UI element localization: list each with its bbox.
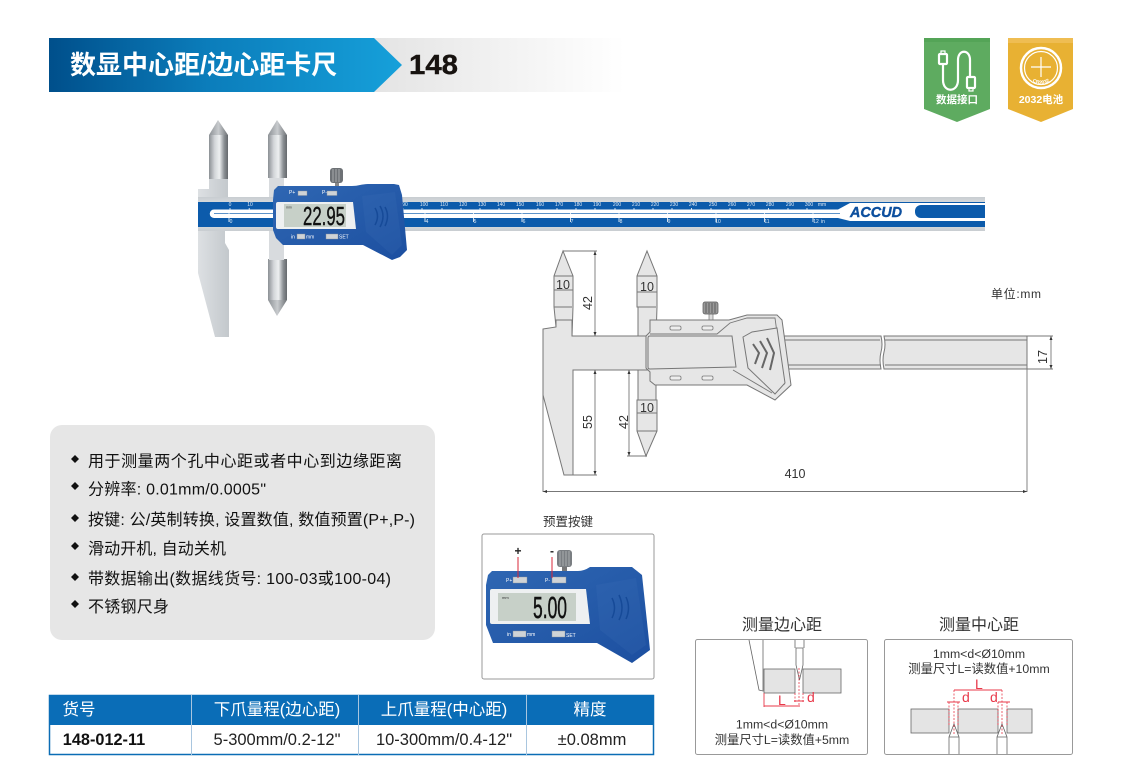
buttons: mm [306, 234, 314, 240]
dimension labels: 410 [785, 467, 805, 481]
inch scale numbers: 11 [764, 219, 770, 225]
data row: 5-300mm/0.2-12" [214, 731, 341, 749]
unit note: 单位:mm [991, 286, 1041, 301]
mm scale numbers: 180 [574, 202, 582, 208]
LCD frame [490, 589, 590, 624]
mm scale numbers: 260 [728, 202, 736, 208]
mm scale numbers: 90 [402, 202, 408, 208]
inch scale numbers: 7 [571, 219, 574, 225]
title: 数显中心距/边心距卡尺 [70, 50, 337, 80]
LCD screen [284, 204, 346, 227]
buttons: in [291, 234, 295, 240]
mm scale numbers: 230 [670, 202, 678, 208]
pin lines [554, 276, 657, 431]
red dimensions [795, 668, 803, 706]
workpiece [764, 669, 841, 693]
dimension letters: d [962, 689, 970, 705]
inch scale numbers: 6 [523, 219, 526, 225]
grip panel [362, 192, 402, 255]
icon: coin cell: CR2032 [1033, 78, 1050, 84]
grip chevrons [753, 338, 774, 370]
grip chevrons [375, 206, 388, 227]
mm scale numbers: 110 [440, 202, 448, 208]
feature list panel [50, 425, 435, 640]
buttons: P+ [506, 578, 512, 584]
mm scale numbers: 100 [420, 202, 428, 208]
panel: preset keys: mm [502, 595, 509, 600]
panel: preset keys [482, 534, 654, 679]
thumb wheel [703, 302, 718, 321]
mm scale numbers: 120 [459, 202, 467, 208]
mm scale numbers: 130 [478, 202, 486, 208]
dimension labels: 10 [640, 401, 654, 415]
grip panel [743, 328, 785, 394]
inch scale numbers: 0 [230, 219, 233, 225]
pins [949, 724, 1007, 754]
inch scale numbers: 12 [813, 219, 819, 225]
badge: data port [924, 38, 990, 122]
buttons: SET [339, 234, 349, 240]
mm scale numbers: 250 [709, 202, 717, 208]
brand logo: ACCUD [849, 204, 902, 221]
sliding jaw [269, 178, 284, 260]
technical drawing [543, 251, 1053, 493]
data row: 10-300mm/0.4-12" [376, 731, 512, 749]
buttons: SET [566, 633, 576, 639]
specification table [49, 695, 654, 755]
electronics housing [486, 567, 650, 663]
feature text: 按键: 公/英制转换, 设置数值, 数值预置(P+,P-) [88, 511, 415, 529]
fixed jaw [749, 640, 763, 691]
buttons: P+ [289, 190, 295, 196]
mm scale numbers: 140 [497, 202, 505, 208]
dimension labels: 10 [640, 280, 654, 294]
dimension letters: d [807, 689, 815, 705]
dimension letters: L [975, 676, 983, 692]
badge: 2032 battery [1008, 38, 1073, 122]
header banner [49, 38, 625, 92]
mm scale numbers: mm [818, 202, 826, 208]
buttons: in [507, 632, 511, 638]
formula: 1mm<d<Ø10mm [736, 718, 828, 732]
mm scale numbers: 280 [766, 202, 774, 208]
feature text: 带数据输出(数据线货号: 100-03或100-04) [88, 570, 391, 588]
feature text: 不锈钢尺身 [88, 598, 169, 616]
pin [795, 640, 804, 680]
buttons: P- [322, 190, 327, 196]
header labels: 下爪量程(边心距) [214, 700, 340, 719]
buttons [506, 577, 576, 639]
electronics housing [273, 184, 407, 260]
header labels [62, 700, 606, 719]
dimension lines [543, 251, 1053, 492]
preset keys heading: 预置按键 [543, 515, 593, 529]
lower pin [637, 370, 657, 456]
ruler ticks [229, 208, 813, 222]
dimension letters: d [990, 689, 998, 705]
button outlines [670, 326, 713, 380]
inch scale numbers [230, 219, 825, 225]
feature text: 分辨率: 0.01mm/0.0005" [88, 480, 266, 498]
formula: 1mm<d<Ø10mm [933, 647, 1025, 661]
data row: ±0.08mm [558, 731, 626, 749]
fixed jaw and beam [543, 320, 647, 475]
plus and minus marks: - [550, 544, 554, 558]
feature text: 滑动开机, 自动关机 [88, 540, 226, 558]
LCD frame [276, 202, 356, 229]
LCD reading: 22.95 [303, 201, 345, 231]
inch scale numbers: 4 [426, 219, 429, 225]
panel: edge distance [696, 640, 868, 754]
grip panel [596, 578, 646, 655]
header labels: 精度 [574, 700, 606, 719]
LCD reading: 5.00 [533, 590, 567, 625]
mm scale numbers: 170 [555, 202, 563, 208]
badge label: 2032电池 [1019, 93, 1064, 106]
inch scale numbers: 10 [715, 219, 721, 225]
mm scale numbers: 270 [747, 202, 755, 208]
bullet markers [71, 455, 79, 608]
upper pin left [209, 120, 228, 179]
red dimensions [949, 690, 1007, 735]
dimension labels: 42 [581, 296, 595, 310]
formula: 测量尺寸L=读数值+5mm [715, 732, 849, 747]
mm scale numbers: 160 [536, 202, 544, 208]
buttons: P- [545, 578, 550, 584]
data row: 148-012-11 [63, 731, 145, 749]
mm scale numbers: 150 [516, 202, 524, 208]
inch scale numbers: in [821, 219, 825, 225]
mm scale numbers: 200 [613, 202, 621, 208]
mm scale numbers: 0 [229, 202, 232, 208]
dimension letters [778, 689, 815, 708]
dimension labels: 17 [1036, 350, 1050, 364]
dimension labels: 55 [581, 415, 595, 429]
table header [49, 695, 654, 725]
formula [715, 718, 849, 747]
feature text: 用于测量两个孔中心距或者中心到边缘距离 [88, 452, 402, 470]
upper pin right [268, 120, 287, 178]
mm scale numbers: 220 [651, 202, 659, 208]
mm scale numbers: 240 [689, 202, 697, 208]
panel: center distance [884, 640, 1072, 754]
dimension labels: 10 [556, 278, 570, 292]
LCD screen [498, 593, 576, 621]
lower pin [268, 259, 287, 316]
inch scale numbers: 8 [620, 219, 623, 225]
plus and minus marks: + [514, 544, 522, 558]
upper jaw pins [554, 251, 573, 337]
inch scale numbers: 9 [668, 219, 671, 225]
workpiece [911, 709, 1032, 733]
model number: 148 [409, 49, 458, 80]
mm scale numbers: 10 [247, 202, 253, 208]
inch scale numbers: 5 [474, 219, 477, 225]
scale window [648, 336, 736, 369]
thumb wheel [330, 168, 343, 187]
edge-distance heading: 测量边心距 [742, 616, 822, 634]
header labels: 上爪量程(中心距) [381, 700, 507, 719]
mm scale numbers: 190 [593, 202, 601, 208]
icon: usb cable [939, 51, 975, 91]
fixed jaw [198, 179, 229, 337]
plus and minus marks [514, 544, 554, 558]
dimension labels [556, 278, 1050, 481]
mm scale numbers: 300 [805, 202, 813, 208]
red pointers [518, 557, 552, 578]
header labels: 货号 [62, 700, 96, 719]
feature text [88, 452, 415, 616]
beam [198, 197, 985, 231]
formula: 测量尺寸L=读数值+10mm [908, 661, 1050, 676]
electronics housing outline [646, 315, 791, 400]
dimension labels: 42 [617, 415, 631, 429]
formula [908, 647, 1050, 676]
buttons [289, 190, 349, 240]
dimension letters: L [778, 692, 786, 708]
mm scale numbers: 290 [786, 202, 794, 208]
product photo: digital caliper: mm [286, 206, 292, 210]
badge label: 数据接口 [936, 93, 978, 106]
data row [63, 731, 626, 749]
mm scale numbers: 210 [632, 202, 640, 208]
center-distance heading: 测量中心距 [939, 616, 1019, 634]
thumb wheel [557, 550, 572, 572]
mm scale numbers [229, 202, 826, 208]
buttons: mm [527, 632, 535, 638]
grip chevrons [612, 595, 628, 620]
dimension letters [962, 676, 998, 705]
product photo: digital caliper [198, 120, 985, 337]
